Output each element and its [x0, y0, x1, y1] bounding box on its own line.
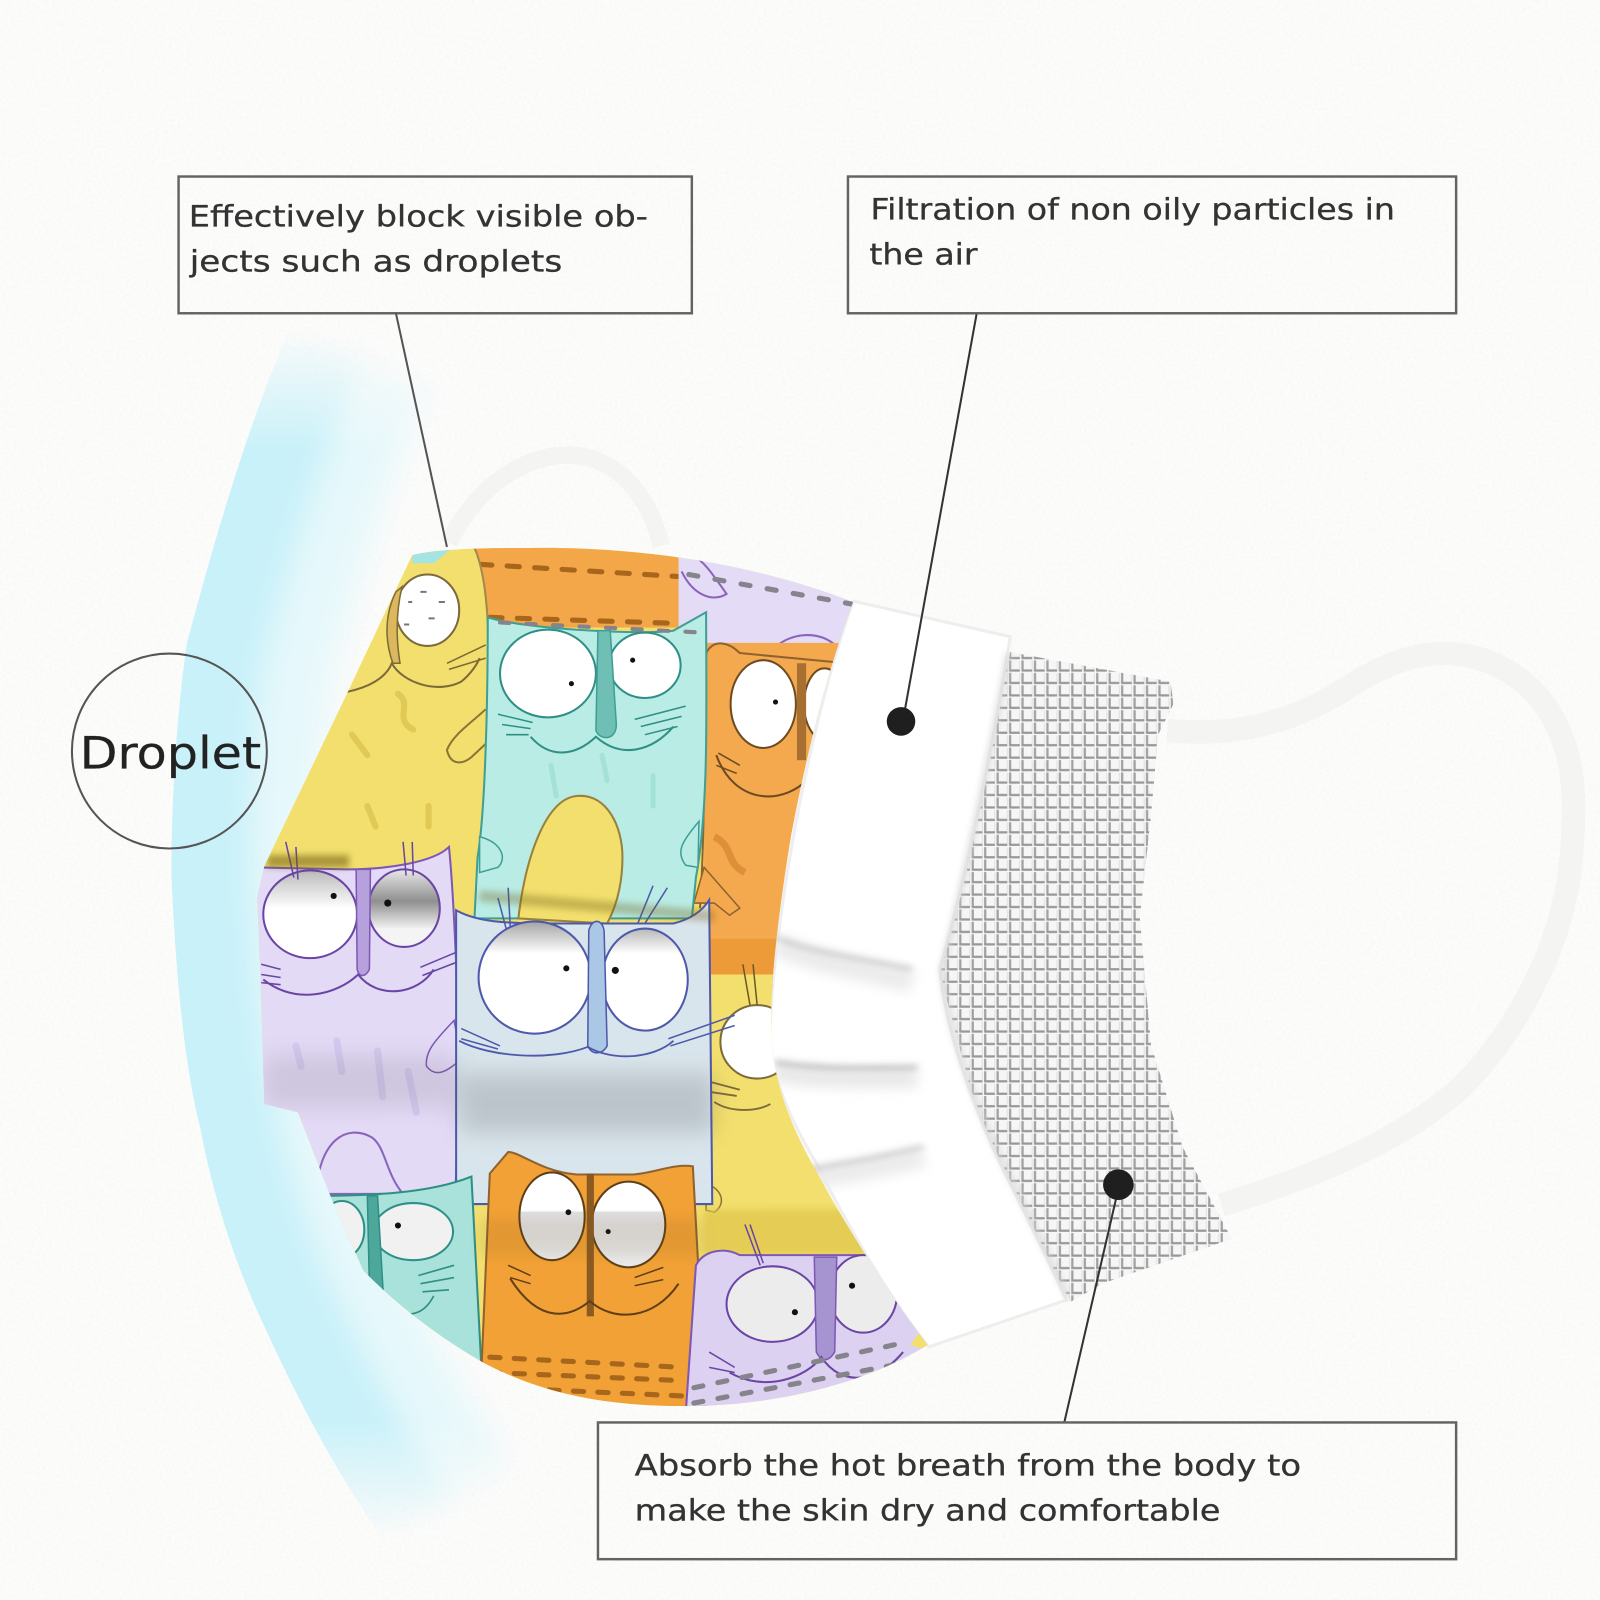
- top orange panel: [474, 541, 681, 628]
- callout: block droplets: jects such as droplets: [189, 244, 562, 278]
- ear loop: left: [449, 455, 661, 546]
- callout: absorb breath: make the skin dry and comfortable: [635, 1493, 1220, 1527]
- callout: filtration: the air: [869, 237, 978, 271]
- teal cat top centre: [474, 612, 706, 923]
- leader with dot: filter layer: [887, 314, 977, 736]
- box: [848, 177, 1456, 313]
- cat tail yellow: [518, 796, 622, 923]
- callout: absorb breath: [598, 1422, 1456, 1559]
- leader with dot: inner layer: [1064, 1169, 1134, 1422]
- text: Filtration of non oily particles in: [870, 192, 1395, 226]
- inner absorbent grid layer: [939, 652, 1232, 1302]
- print crease shadows: [263, 855, 714, 1255]
- box: [598, 1422, 1456, 1559]
- callout: block droplets: [179, 177, 692, 313]
- droplet circle label: Droplet: [80, 726, 261, 779]
- box: [179, 177, 692, 313]
- orange cat bottom: [480, 1152, 706, 1413]
- teal cat bottom left: [330, 1175, 482, 1362]
- orange cat right: [694, 642, 839, 995]
- purple cat left: [255, 842, 461, 1204]
- droplet circle label: [72, 654, 267, 848]
- yellow cat top left: [245, 547, 489, 898]
- blue grey cat centre: [456, 886, 735, 1204]
- leader line: outer layer: [396, 313, 447, 547]
- callout: filtration: [848, 177, 1456, 313]
- blue droplet layer crescent: [171, 327, 383, 1541]
- printed outer layer with cats: [245, 541, 944, 1418]
- filter layer edge shadow: [942, 653, 1068, 1298]
- white middle filter layer: [770, 601, 1068, 1347]
- text: Absorb the hot breath from the body to: [635, 1449, 1301, 1483]
- top lilac panel: [678, 558, 853, 658]
- fold shadows: [774, 938, 923, 1179]
- yellow cat lower right: [704, 964, 880, 1260]
- ear loop: right: [1167, 653, 1573, 1205]
- purple cat bottom right: [686, 1224, 944, 1413]
- text: Effectively block visible ob-: [189, 200, 648, 234]
